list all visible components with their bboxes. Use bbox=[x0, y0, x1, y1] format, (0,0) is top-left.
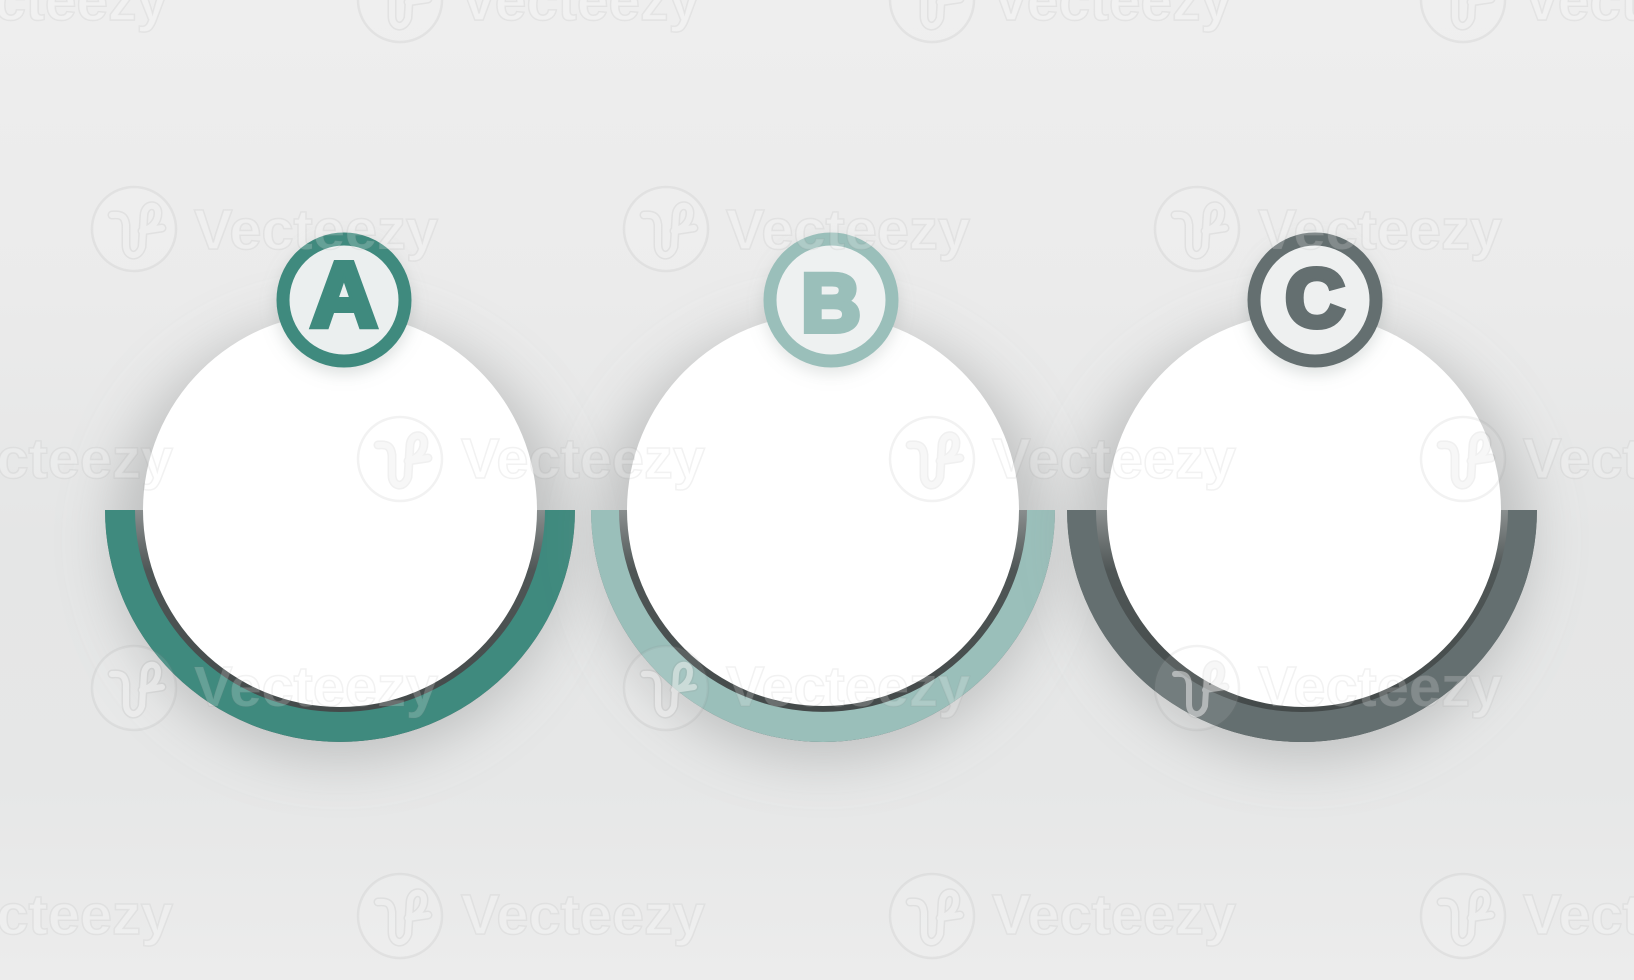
watermark row 5: Vecteezy bbox=[992, 883, 1236, 947]
watermark row 3 bbox=[0, 417, 1634, 501]
shadow B bbox=[597, 320, 1049, 760]
white circle A bbox=[143, 313, 537, 707]
white circle C bbox=[1107, 313, 1501, 707]
white circle B bbox=[627, 314, 1019, 706]
shadow A bbox=[112, 320, 568, 760]
arc band C bbox=[1067, 510, 1537, 742]
watermark row 4: Vecteezy bbox=[194, 655, 438, 719]
watermark row 5: Vecteezy bbox=[461, 883, 705, 947]
panel A bbox=[105, 238, 575, 760]
watermark row 2 bbox=[92, 187, 1502, 271]
arc band B bbox=[591, 510, 1055, 742]
watermark row 3: Vecteezy bbox=[992, 427, 1236, 491]
badge A bbox=[276, 238, 412, 374]
arc band A bbox=[105, 510, 575, 742]
watermark row 2: Vecteezy bbox=[194, 198, 438, 262]
shadow C bbox=[1075, 320, 1531, 760]
badge B bbox=[763, 238, 899, 374]
panel B bbox=[591, 238, 1055, 760]
watermark row 1 bbox=[0, 0, 1634, 42]
watermark row 4: Vecteezy bbox=[1258, 655, 1502, 719]
letter A: A bbox=[311, 244, 377, 346]
watermark row 4 bbox=[92, 646, 1502, 730]
letter C: C bbox=[1285, 253, 1345, 344]
badge C bbox=[1247, 238, 1383, 374]
watermark row 4: Vecteezy bbox=[726, 655, 970, 719]
letter B: B bbox=[801, 258, 861, 349]
watermark row 5 bbox=[0, 874, 1634, 958]
panel C bbox=[1067, 238, 1537, 760]
watermark row 3: Vecteezy bbox=[461, 427, 705, 491]
watermark row 2: Vecteezy bbox=[1258, 198, 1502, 262]
watermark row 2: Vecteezy bbox=[726, 198, 970, 262]
